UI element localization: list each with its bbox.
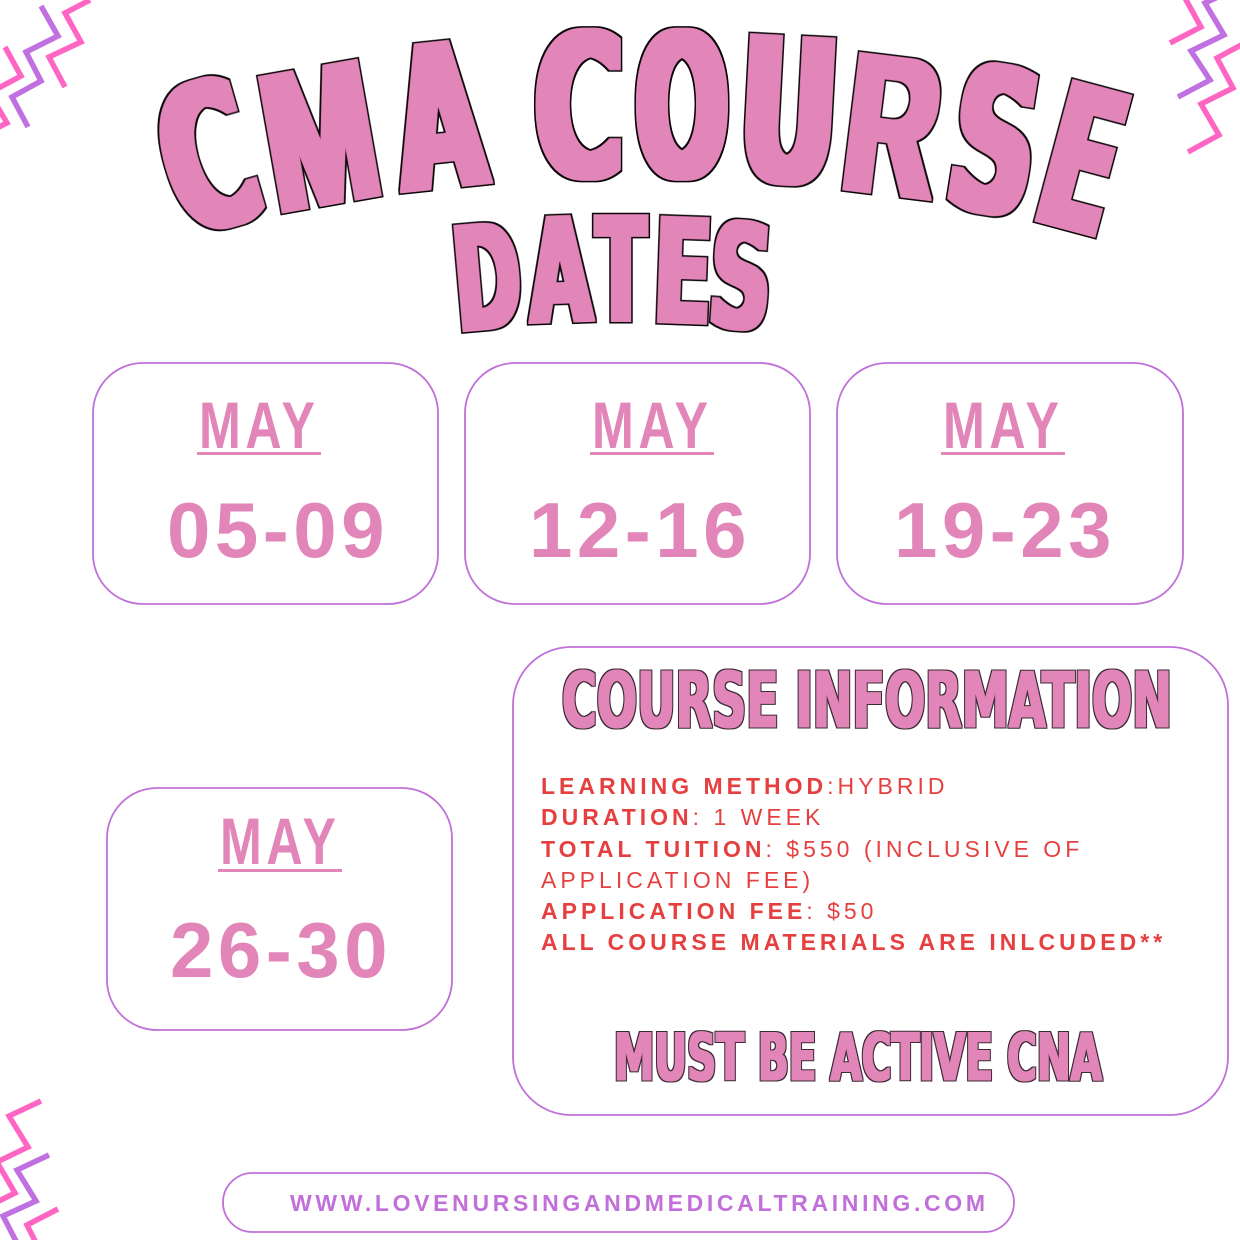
title: DATES: E (651, 188, 714, 359)
title: CMA COURSE: S (935, 22, 1054, 265)
panel: course information (513, 647, 1228, 1115)
title: CMA COURSE: U (734, 0, 843, 232)
text block: course details: APPLICATION FEE) (541, 867, 814, 893)
month label: MAY (220, 805, 341, 879)
panel: May 12-16 (465, 363, 810, 604)
panel: May 05-09 (93, 363, 438, 604)
text block: course details: DURATION: 1 WEEK (541, 804, 824, 830)
panel: May 26-30 (107, 788, 452, 1030)
date range: 05-09 (167, 486, 389, 574)
date range: 12-16 (529, 486, 751, 574)
text block: course details: LEARNING METHOD:HYBRID (541, 773, 948, 799)
title: DATES: T (596, 187, 646, 356)
text block: course details (541, 773, 1166, 955)
title: CMA COURSE: M (247, 17, 392, 256)
month label: MAY (199, 389, 320, 463)
title: DATES (447, 187, 777, 367)
title: DATES: S (704, 192, 777, 365)
website pill (223, 1173, 1014, 1232)
title: DATES: A (527, 187, 594, 358)
title: CMA COURSE: E (1018, 41, 1145, 284)
decoration: zigzags top left (0, 0, 90, 129)
title: CMA COURSE: C (134, 35, 283, 283)
decoration: zigzags bottom left (0, 1101, 58, 1240)
month label: MAY (943, 389, 1064, 463)
text block: course details: ALL COURSE MATERIALS ARE INLCUDED** (541, 929, 1166, 955)
title: DATES: D (447, 192, 528, 367)
decoration: zigzags top right (1170, 0, 1240, 152)
title: CMA COURSE: R (834, 10, 951, 243)
date range: 26-30 (170, 906, 392, 994)
month label: MAY (592, 389, 713, 463)
website url: WWW.LOVENURSINGANDMEDICALTRAINING.COM (290, 1190, 985, 1216)
date range: 19-23 (894, 486, 1116, 574)
text block: course details: TOTAL TUITION: $550 (INCLUSIVE OF (541, 836, 1083, 862)
title: CMA COURSE (134, 0, 1145, 284)
panel: May 19-23 (837, 363, 1183, 604)
text block: course details: APPLICATION FEE: $50 (541, 898, 877, 924)
